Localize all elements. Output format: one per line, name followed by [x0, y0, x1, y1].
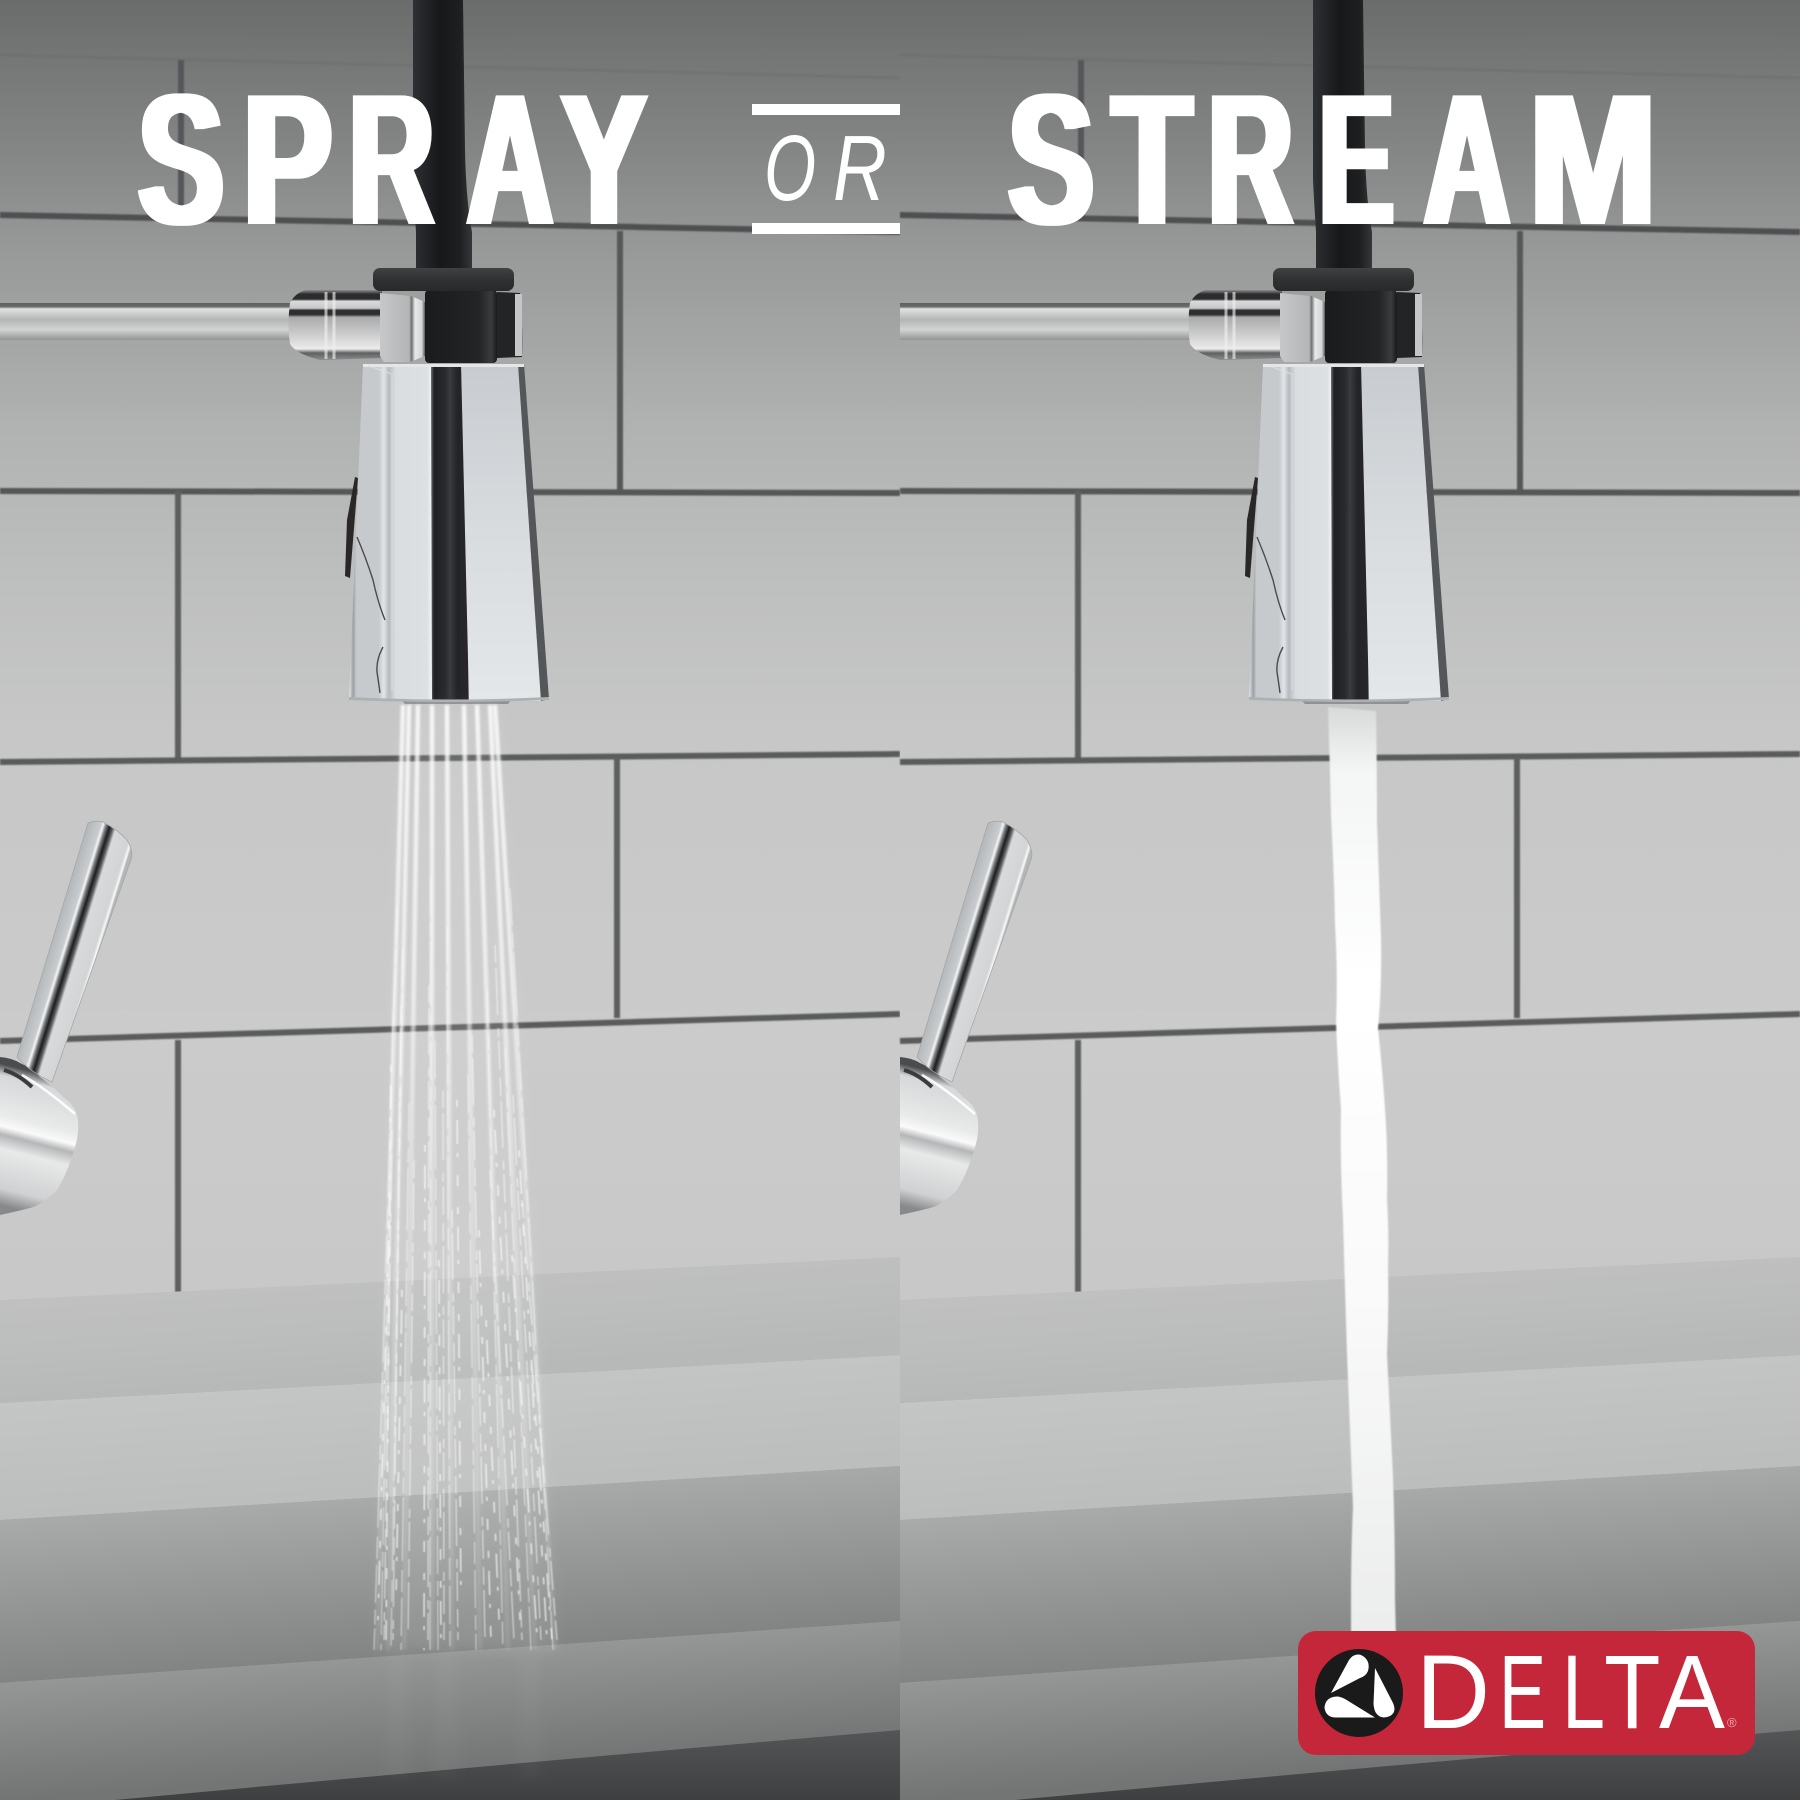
collar: [373, 268, 514, 291]
heading: OR: O: [764, 116, 816, 220]
countertop: [0, 1257, 900, 1800]
heading: STREAM: [1008, 55, 1657, 264]
spray water: [374, 705, 557, 1780]
heading: SPRAY: R: [349, 55, 434, 264]
heading: SPRAY: S: [138, 55, 224, 264]
heading: STREAM: R: [1208, 55, 1293, 264]
stream water: [1328, 707, 1396, 1640]
fine droplets group three: [378, 1065, 552, 1650]
left chrome clip: [380, 293, 425, 362]
spray haze: [377, 705, 557, 1650]
wordmark: DELTA: L: [1562, 1634, 1605, 1750]
connector groove: [326, 292, 334, 359]
black ring: [425, 290, 497, 363]
wordmark: DELTA: D: [1416, 1634, 1490, 1750]
panel: spray scene: [0, 0, 900, 1800]
panel: stream scene: [900, 0, 1800, 1800]
heading: SPRAY: A: [467, 55, 553, 264]
wordmark: DELTA: ®: [1727, 1715, 1737, 1730]
heading: STREAM: S: [1008, 55, 1094, 264]
heading: STREAM: M: [1529, 55, 1657, 264]
wordmark: DELTA: T: [1604, 1634, 1660, 1750]
heading: STREAM: E: [1319, 55, 1394, 264]
heading: STREAM: T: [1112, 55, 1192, 264]
lever handle: [17, 821, 132, 1082]
trigger button: [345, 477, 358, 578]
heading: SPRAY: Y: [561, 55, 647, 264]
divider: bottom rule: [752, 223, 900, 234]
arm connector: [288, 290, 382, 360]
heading: OR: R: [833, 116, 887, 220]
icon: black hose: [413, 0, 472, 272]
main spray streams: [377, 705, 555, 1650]
heading: OR: [764, 116, 887, 220]
wordmark: DELTA: E: [1499, 1634, 1546, 1750]
lever base: [0, 1057, 78, 1215]
wordmark: DELTA: [1416, 1634, 1737, 1750]
logo: Delta: [1298, 1631, 1755, 1755]
fine droplets group two: [384, 945, 557, 1640]
right clip highlight: [515, 294, 522, 356]
heading: STREAM: A: [1424, 55, 1510, 264]
nozzle plate: [400, 699, 512, 704]
heading: SPRAY: P: [243, 55, 332, 264]
icon: Delta emblem: [1315, 1649, 1403, 1737]
wordmark: DELTA: A: [1659, 1634, 1725, 1750]
faucet arm: [0, 303, 292, 340]
wall tiles: [0, 0, 900, 1302]
fine droplets group one: [374, 877, 553, 1650]
heading: SPRAY: [138, 55, 649, 264]
divider: top rule: [752, 104, 900, 115]
right clip: [497, 292, 522, 358]
faucet spray head: [349, 364, 549, 702]
spray reflection: [398, 1650, 530, 1780]
